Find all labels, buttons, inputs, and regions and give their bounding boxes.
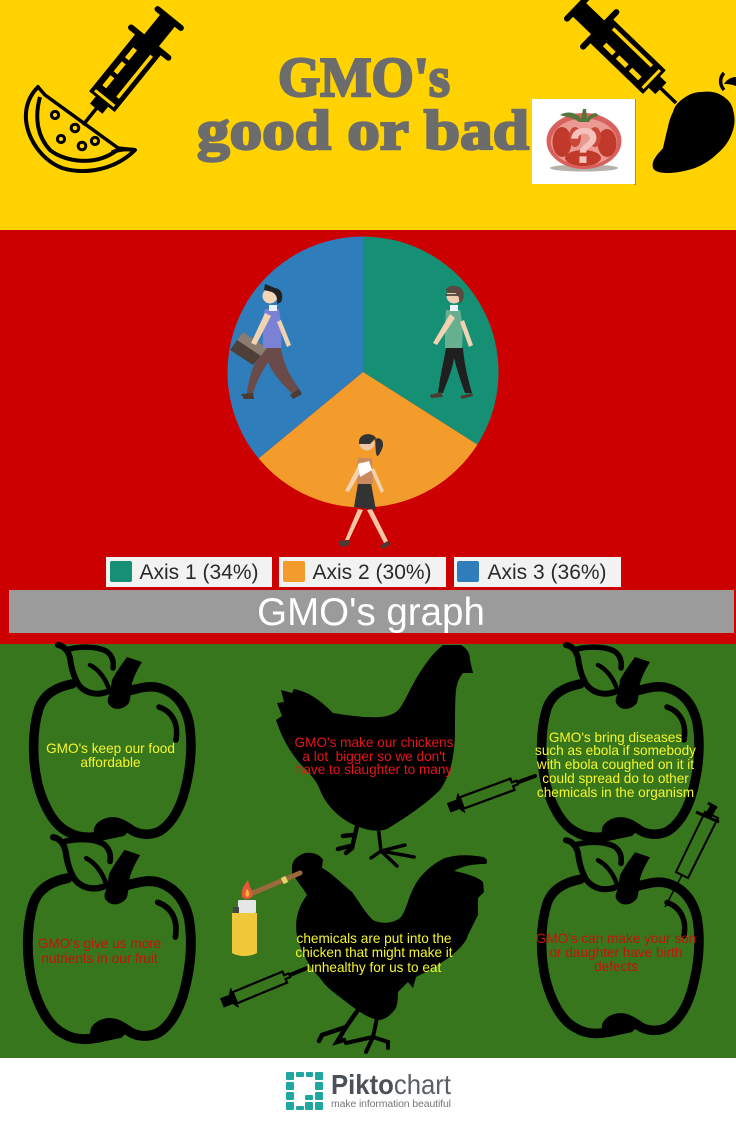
text: bigger chickens: GMO's make our chickens — [295, 735, 454, 750]
apple: top right — [542, 645, 699, 841]
apple: bottom right — [542, 840, 699, 1037]
icon: watermelon slice — [26, 87, 135, 171]
icon: syringe into watermelon — [62, 0, 192, 142]
figure: man with briefcase — [230, 284, 302, 399]
figure: man with glasses — [430, 286, 473, 399]
icon: mango — [653, 73, 736, 173]
text: keep food affordable: GMO's keep our food — [46, 741, 175, 756]
image: tomato with question mark — [532, 99, 636, 185]
icon: lighter and match — [232, 873, 300, 956]
text: birth defects: defects — [594, 959, 638, 974]
panel: green facts section — [0, 644, 736, 1058]
legend item: axis 2: Axis 2 (30%) — [312, 561, 432, 584]
text: chemicals in chicken — [295, 931, 453, 975]
graph caption bar: GMO's graph — [257, 591, 485, 634]
icon: syringe vertical — [665, 803, 719, 907]
legend — [106, 557, 621, 587]
text: diseases: chemicals in the organism — [537, 785, 694, 800]
text: bigger chickens: have to slaughter to many — [296, 762, 452, 777]
text: bigger chickens — [295, 735, 454, 777]
text: diseases — [535, 730, 696, 800]
icon: piktochart mark — [286, 1072, 323, 1110]
legend item: axis 3: Axis 3 (36%) — [488, 561, 607, 584]
text: diseases: GMO's bring diseases — [549, 730, 682, 745]
icon: syringe lower — [218, 959, 311, 1012]
text: birth defects: or daughter have birth — [549, 945, 683, 960]
legend item: axis 3 — [454, 557, 621, 587]
icon: hen silhouette — [276, 645, 473, 866]
text: tagline: make information beautiful — [331, 1098, 451, 1110]
text: diseases: such as ebola if somebody — [535, 743, 696, 758]
apple: top left — [34, 645, 191, 841]
title: good or bad — [197, 100, 529, 162]
apple: bottom left — [28, 837, 191, 1043]
panel: yellow header — [0, 0, 736, 230]
title: GMO's — [278, 47, 450, 109]
legend item: axis 1: Axis 1 (34%) — [140, 561, 259, 584]
legend item: axis 1 — [106, 557, 272, 587]
text: more nutrients — [38, 936, 161, 966]
image: tomato with question mark: ? — [569, 118, 599, 174]
text: bigger chickens: a lot bigger so we don't — [302, 749, 446, 764]
panel: red graph section — [0, 230, 736, 644]
text: diseases: with ebola coughed on it it — [536, 757, 694, 772]
figure: woman walking — [338, 434, 391, 549]
text: more nutrients: nutrients in our fruit — [41, 951, 158, 966]
legend item: axis 2 — [279, 557, 446, 587]
text: birth defects — [536, 931, 696, 974]
icon: rooster silhouette — [292, 853, 487, 1052]
text: chemicals in chicken: chemicals are put into the — [297, 931, 451, 946]
text: chemicals in chicken: chicken that might make it — [295, 945, 453, 960]
text: keep food affordable — [46, 741, 175, 770]
graph caption bar — [9, 590, 734, 634]
icon: syringe into mango — [557, 0, 695, 122]
title — [197, 47, 529, 162]
footer: piktochart logo — [0, 1058, 736, 1125]
text: birth defects: GMO's can make your son — [536, 931, 696, 946]
text: chemicals in chicken: unhealthy for us to eat — [307, 960, 441, 975]
text: piktochart wordmark: Piktochart — [331, 1069, 451, 1100]
text: diseases: could spread do to other — [542, 771, 689, 786]
text: more nutrients: GMO's give us more — [38, 936, 161, 951]
text: keep food affordable: affordable — [80, 755, 141, 770]
pie chart — [227, 236, 498, 508]
icon: syringe upper — [445, 767, 538, 817]
